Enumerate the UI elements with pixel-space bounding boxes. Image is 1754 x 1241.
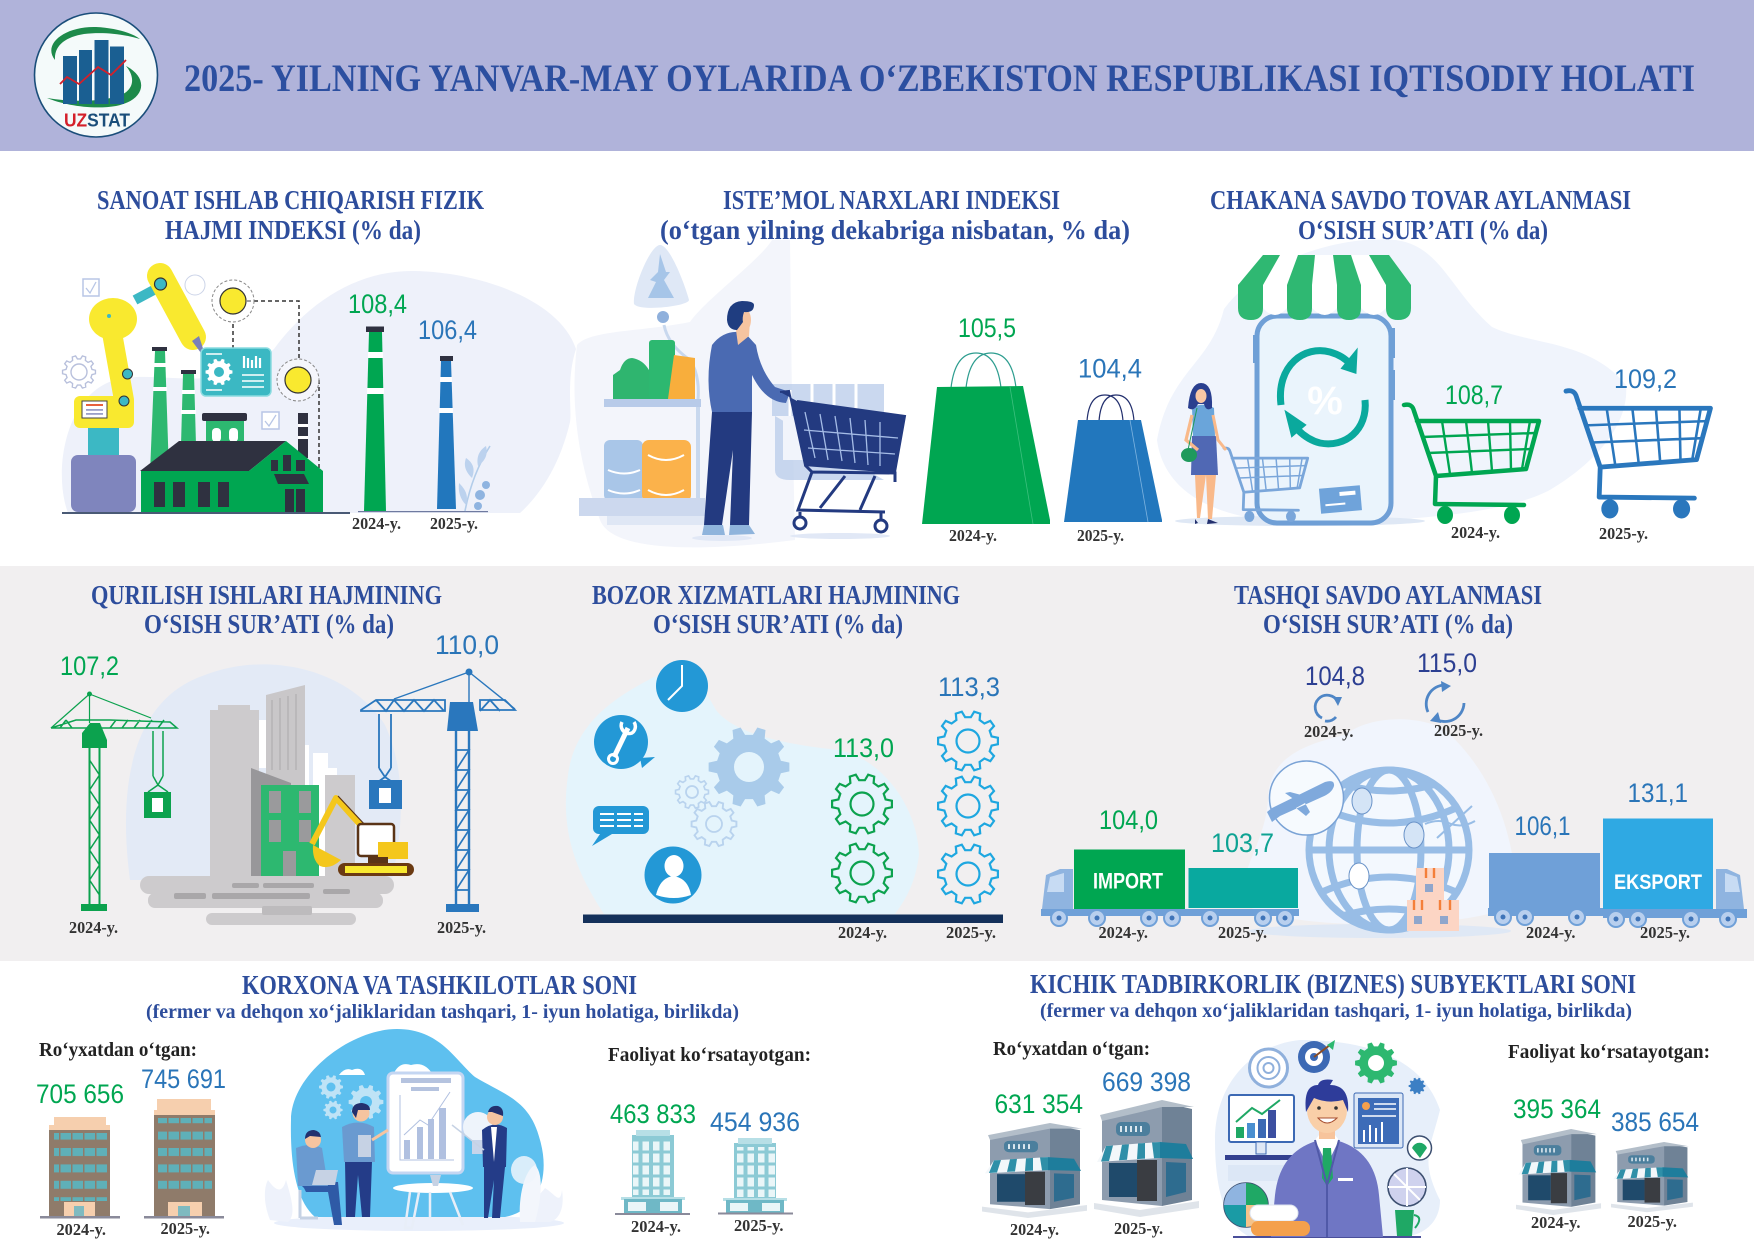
panel: industrial production index [62,185,576,533]
panel: foreign trade turnover [1041,580,1747,942]
icon: import truck: IMPORT [1093,868,1163,894]
values and year labels: 2025-y. [160,1219,210,1238]
heading: CHAKANA SAVDO TOVAR AYLANMASI [1210,185,1631,215]
heading: SANOAT ISHLAB CHIQARISH FIZIK [97,185,484,215]
heading: (fermer va dehqon xo‘jaliklaridan tashqari, 1- iyun holatiga, birlikda) [146,1001,739,1023]
panel: construction [51,580,515,937]
icon: export truck: EKSPORT [1614,871,1702,894]
values and year labels: 108,7 [1445,380,1503,410]
heading: ISTE’MOL NARXLARI INDEKSI [723,185,1060,215]
values and year labels [348,289,478,533]
chart: blue gears [938,712,998,903]
values and year labels: 2025-y. [1218,923,1267,942]
heading [91,580,442,639]
heading: KICHIK TADBIRKORLIK (BIZNES) SUBYEKTLARI SONI [1030,969,1636,999]
icon: factory [62,347,350,514]
values and year labels: 107,2 [60,651,119,681]
values and year labels: 2024-y. [838,923,887,942]
heading: HAJMI INDEKSI (% da) [165,215,421,245]
values and year labels: 115,0 [1417,648,1477,678]
heading [592,580,960,639]
heading [1030,969,1636,1022]
values and year labels [36,1064,800,1239]
values and year labels: 113,3 [938,672,1000,702]
values and year labels: 631 354 [994,1089,1083,1119]
awning [1238,255,1411,320]
values and year labels [949,313,1142,545]
icon: shops [982,1100,1693,1218]
values and year labels: 2024-y. [69,918,118,937]
icon: gears cluster [676,727,789,846]
icon: woman with small cart [1181,383,1308,524]
icon: dashboard with sensors [201,280,319,469]
icon: team with growth chart [265,1029,564,1231]
values and year labels: 104,4 [1078,354,1142,384]
decorative plant [459,446,490,511]
values and year labels: 2024-y. [352,514,401,533]
values and year labels: 2025-y. [734,1216,784,1235]
icon: globe with plane and boxes [1249,761,1511,938]
group labels: Faoliyat ko‘rsatayotgan: [1508,1041,1710,1063]
values and year labels: 2024-y. [1304,722,1354,741]
values and year labels: 2024-y. [1526,923,1576,942]
icon: man with cart [692,301,905,541]
icon: blue crane [361,669,515,912]
values and year labels [833,672,1000,942]
icon: teal towers [615,1130,793,1215]
values and year labels: 2024-y. [631,1217,681,1236]
values and year labels: 2024-y. [1451,523,1500,542]
values and year labels: 106,1 [1514,811,1570,841]
values and year labels: 385 654 [1611,1107,1699,1137]
heading [1210,185,1631,245]
heading [97,185,484,245]
icon: buildings and excavator [140,685,414,925]
panel: market services [566,580,1003,942]
icon: import truck [1041,850,1299,926]
heading: BOZOR XIZMATLARI HAJMINING [592,580,960,610]
heading: O‘SISH SUR’ATI (% da) [144,609,394,639]
heading: KORXONA VA TASHKILOTLAR SONI [242,970,637,1000]
icon: businessman with charts [1215,1040,1440,1238]
values and year labels: 463 833 [610,1099,696,1129]
heading: (o‘tgan yilning dekabriga nisbatan, % da) [660,215,1130,245]
values and year labels: 2025-y. [1077,526,1124,545]
illustration background [126,664,401,880]
group labels: Ro‘yxatdan o‘tgan: [39,1039,197,1061]
icon: turnover arrows [1315,681,1464,723]
values and year labels: 109,2 [1614,364,1677,394]
values and year labels: 705 656 [36,1079,124,1109]
icon: UZSTAT logo [34,13,158,137]
values and year labels: 2025-y. [1640,923,1690,942]
icon: export truck [1488,818,1747,927]
icon: green crane [51,692,177,911]
icon: clock [656,660,708,712]
icon: wrench [594,715,655,769]
chart: shopping cart bars [1404,391,1710,524]
values and year labels: 104,0 [1099,805,1158,835]
values and year labels: 2025-y. [1628,1212,1677,1231]
base bar [583,914,1003,923]
icon: brown buildings [40,1099,224,1218]
icon: robot arm [71,276,207,512]
illustration background [1157,239,1626,522]
illustration background [574,240,795,547]
heading: O‘SISH SUR’ATI (% da) [653,609,903,639]
values and year labels [1445,364,1677,543]
values and year labels: 2025-y. [430,514,478,533]
illustration background [566,674,919,914]
heading: QURILISH ISHLARI HAJMINING [91,580,442,610]
values and year labels: 745 691 [141,1064,226,1094]
heading: O‘SISH SUR’ATI (% da) [1263,609,1513,639]
panel: small business entities [982,969,1710,1239]
heading [1234,580,1542,639]
values and year labels: 2025-y. [1114,1219,1163,1238]
values and year labels: 108,4 [348,289,407,319]
panel: enterprises and organisations [36,970,811,1239]
values and year labels: 2024-y. [1010,1220,1059,1239]
values and year labels: 103,7 [1211,828,1274,858]
values and year labels: 2024-y. [1098,923,1148,942]
chart: shopping bag bars [922,353,1162,524]
icon: store shelf with goods [579,245,705,525]
header banner [0,0,1754,151]
heading: O‘SISH SUR’ATI (% da) [1298,215,1548,245]
values and year labels [994,1067,1699,1239]
icon: person [644,846,702,904]
values and year labels: 2024-y. [56,1220,106,1239]
values and year labels: 454 936 [710,1107,800,1137]
values and year labels: 2025-y. [1599,524,1648,543]
values and year labels: 113,0 [833,733,894,763]
values and year labels: 2025-y. [946,923,996,942]
group labels: Faoliyat ko‘rsatayotgan: [608,1044,811,1066]
values and year labels: 669 398 [1102,1067,1191,1097]
icon: UZSTAT logo: UZSTAT [64,110,130,130]
values and year labels: 105,5 [958,313,1016,343]
values and year labels: 2024-y. [1531,1213,1580,1232]
values and year labels: 104,8 [1305,661,1365,691]
values and year labels: 110,0 [435,630,499,660]
values and year labels [60,630,499,937]
chart: chimney bars [358,326,488,512]
heading [146,970,739,1023]
values and year labels: 395 364 [1513,1094,1601,1124]
icon: chat bubble [592,806,649,846]
values and year labels: 106,4 [418,315,477,345]
grey middle band [0,566,1754,961]
values and year labels: 2025-y. [1434,721,1483,740]
values and year labels: 2025-y. [437,918,486,937]
heading [660,185,1130,245]
values and year labels: 131,1 [1628,778,1688,808]
icon: phone store [1175,255,1425,526]
values and year labels: 2024-y. [949,526,997,545]
group labels: Ro‘yxatdan o‘tgan: [993,1038,1150,1060]
percent symbol: % [1307,379,1343,423]
heading: (fermer va dehqon xo‘jaliklaridan tashqari, 1- iyun holatiga, birlikda) [1040,1000,1632,1022]
panel: retail turnover [1157,185,1710,543]
group labels [993,1038,1710,1063]
chart: green gears [832,775,892,902]
group labels [39,1039,811,1066]
values and year labels [1098,648,1690,942]
illustration background blob [62,271,576,513]
decorative gear and checkboxes [63,275,279,429]
heading: TASHQI SAVDO AYLANMASI [1234,580,1542,610]
illustration background [1240,719,1517,924]
panel: consumer price index [574,185,1162,547]
